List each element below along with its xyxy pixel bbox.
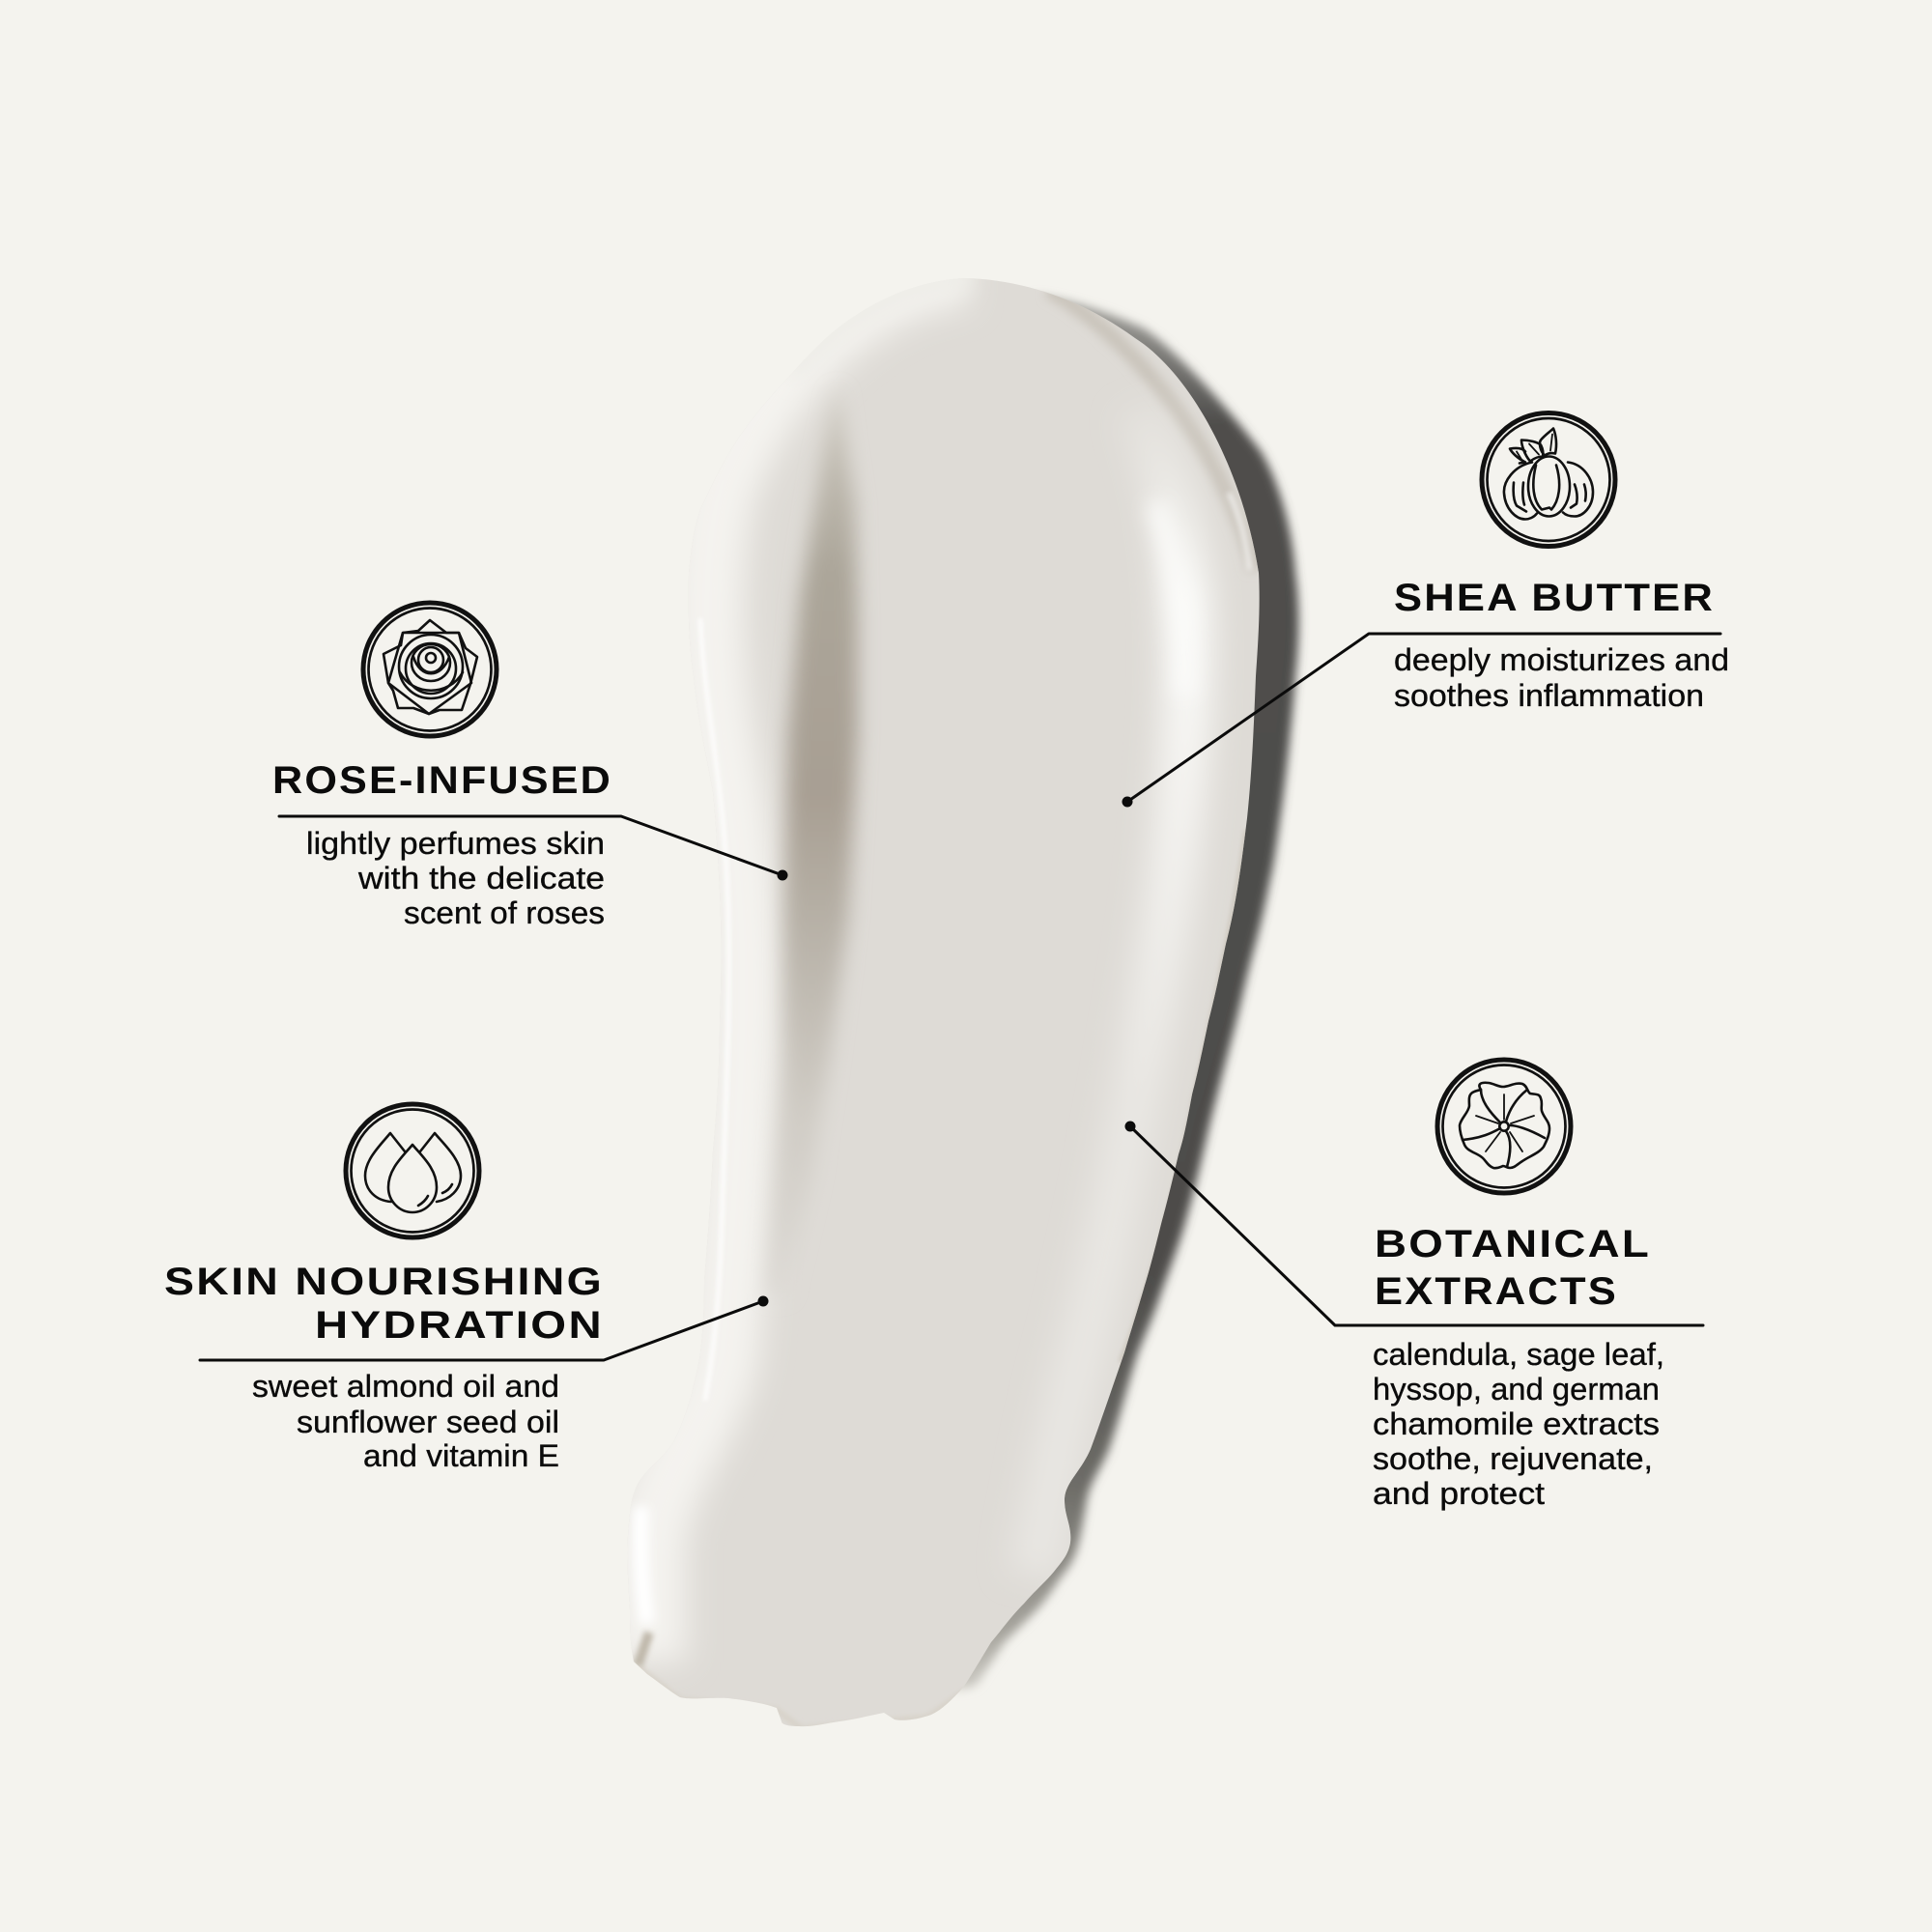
heading: skin nourishing hydration: HYDRATION [315, 1304, 604, 1347]
description: botanical extracts [1373, 1337, 1664, 1511]
description: shea butter [1394, 642, 1729, 713]
description: skin nourishing hydration: sweet almond oil and [252, 1369, 559, 1404]
description: botanical extracts: and protect [1373, 1476, 1545, 1511]
panel: skin nourishing hydration [164, 1104, 769, 1473]
panel: botanical extracts [1124, 1060, 1703, 1511]
heading: botanical extracts: BOTANICAL [1375, 1223, 1651, 1265]
leader line: botanical extracts [1124, 1121, 1703, 1325]
panel: shea butter [1122, 413, 1729, 808]
description: botanical extracts: hyssop, and german [1373, 1372, 1660, 1406]
description: skin nourishing hydration: and vitamin E [363, 1438, 559, 1473]
leader line: shea butter [1122, 634, 1720, 808]
icon: flower [1437, 1060, 1571, 1193]
panel: rose-infused [272, 603, 788, 930]
description: shea butter: deeply moisturizes and [1394, 642, 1729, 677]
cream body [632, 278, 1260, 1727]
heading: shea butter: SHEA BUTTER [1394, 577, 1715, 619]
leader line: rose-infused [279, 816, 788, 881]
leader line: skin nourishing hydration [200, 1296, 769, 1360]
description: rose-infused: with the delicate [357, 861, 605, 895]
heading: botanical extracts [1375, 1223, 1651, 1313]
heading: skin nourishing hydration: SKIN NOURISHING [164, 1261, 604, 1303]
heading: botanical extracts: EXTRACTS [1375, 1270, 1618, 1313]
icon: three droplets [346, 1104, 479, 1237]
description: shea butter: soothes inflammation [1394, 678, 1704, 713]
description: rose-infused: scent of roses [404, 895, 605, 930]
description: skin nourishing hydration: sunflower seed oil [297, 1405, 559, 1439]
description: botanical extracts: chamomile extracts [1373, 1406, 1660, 1441]
description: rose-infused: lightly perfumes skin [306, 826, 605, 861]
cast shadow of cream [956, 296, 1298, 1690]
description: botanical extracts: calendula, sage leaf, [1373, 1337, 1664, 1372]
icon: shea nuts [1482, 413, 1615, 547]
description: skin nourishing hydration [252, 1369, 559, 1473]
heading: skin nourishing hydration [164, 1261, 604, 1347]
heading: rose-infused: ROSE-INFUSED [272, 759, 612, 802]
cream swatch [599, 261, 1298, 1748]
description: botanical extracts: soothe, rejuvenate, [1373, 1441, 1653, 1476]
icon: rose [363, 603, 497, 736]
description: rose-infused [306, 826, 605, 930]
